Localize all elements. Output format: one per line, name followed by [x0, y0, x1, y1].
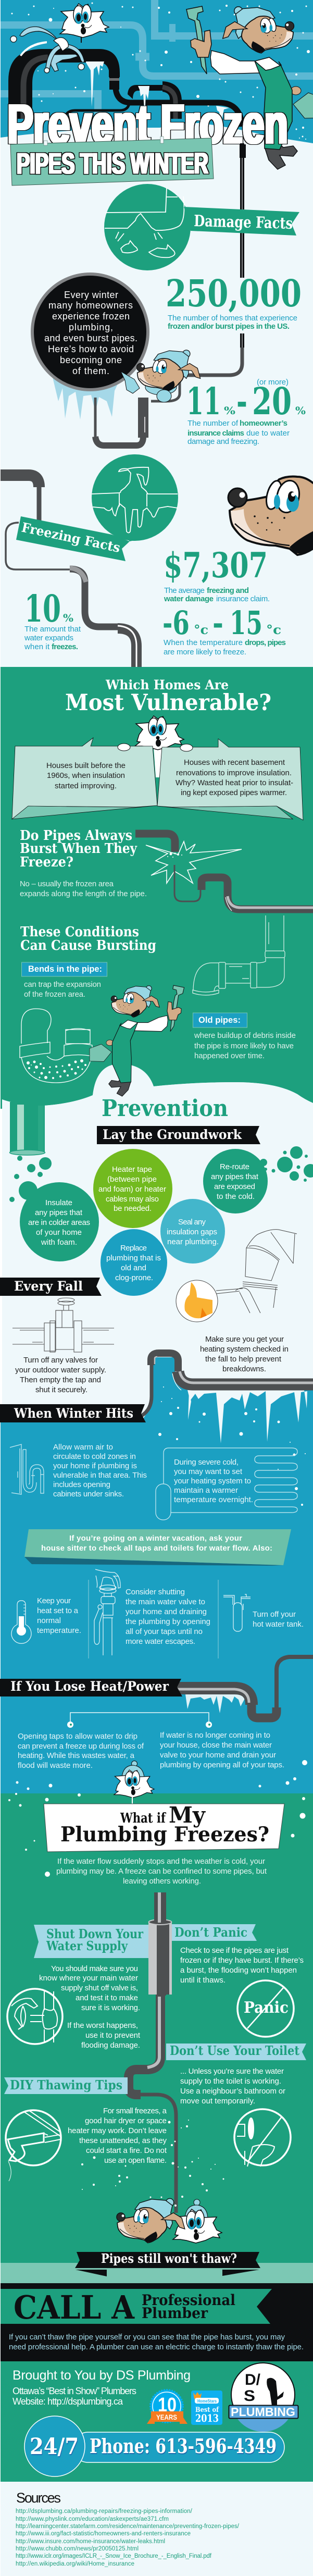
- text: unless: Use a neighbour’s bathroom or: [180, 2087, 285, 2096]
- stat: -6C to -15C: are more likely to freeze.: [164, 648, 246, 657]
- heading: which homes: Most Vulnerable?: [65, 690, 271, 716]
- banner: vacation note: house sitter to check all taps and toilets for water flow. Also:: [41, 1544, 272, 1553]
- stat: 10%: water expands: [24, 634, 73, 642]
- winding grey pipe: left: [1, 475, 136, 667]
- text: main water valve: If the worst happens,: [67, 2021, 138, 2030]
- sign: what if my plumbing freezes: What if: [120, 1811, 166, 1826]
- circle: seal: insulation gaps: [167, 1228, 217, 1236]
- icon: hand on valve: [7, 1989, 62, 2044]
- circle: seal: Seal any: [178, 1218, 206, 1227]
- text: opening taps: [18, 1732, 144, 1770]
- panel: basement renovations: Houses with recent basement: [184, 758, 285, 767]
- stat: $7,307: The average: [164, 586, 205, 595]
- stat: 11% to 20%: -: [236, 379, 247, 423]
- intro circle: experience frozen: [52, 311, 130, 321]
- title sign: [10, 137, 214, 185]
- text: allow warm air: your home if plumbing is: [53, 1462, 137, 1470]
- text: opening taps: can prevent a freeze up during loss of: [18, 1742, 144, 1751]
- stat: 11% to 20%: (or more): [257, 378, 289, 387]
- panel: call a professional plumber: If you can’t thaw the pipe yourself or you can see that the pipe has burst, you may: [9, 2333, 285, 2342]
- black pipes with ice: [8, 41, 242, 128]
- ribbon: DIY thawing tips: DIY Thawing Tips: [10, 2077, 122, 2092]
- title sign: PIPES THIS WINTER: [17, 147, 208, 180]
- text: turn off tank: Turn off your: [253, 1610, 296, 1619]
- stat: $7,307: [164, 545, 270, 603]
- stat: 11% to 20%: %: [295, 404, 306, 417]
- text: old pipes explanation: happened over time.: [194, 1051, 265, 1060]
- text: small freezes: use an open flame.: [104, 2156, 167, 2165]
- heading: sources: Sources: [16, 2490, 61, 2506]
- text: main water valve: supply shut off valve is,: [61, 1984, 138, 1992]
- background pale pipes: [1, 0, 313, 128]
- text: main water valve: sure it is working.: [81, 2003, 140, 2012]
- heading: these conditions: Can Cause Bursting: [20, 938, 156, 953]
- label: bends in the pipe: [22, 962, 107, 976]
- circle: replace: plumbing that is: [106, 1254, 161, 1262]
- icon: thermometer: [11, 1601, 31, 1643]
- text: brought to you by: [12, 2368, 191, 2407]
- text: water no longer coming: [160, 1731, 284, 1769]
- text: severe cold: [174, 1458, 253, 1504]
- thin riser pipe: [185, 143, 246, 375]
- text: old pipes explanation: [194, 1031, 296, 1060]
- sign: what if my plumbing freezes: My: [169, 1802, 206, 1828]
- banner: vacation note: If you’re going on a winter vacation, ask your: [69, 1534, 242, 1543]
- text: bends explanation: can trap the expansion: [24, 980, 101, 989]
- list: source links: http://learningcenter.statefarm.com/residence/maintenance/preventing-frozen-pipes/: [16, 2523, 240, 2530]
- text: keep heat: Keep your: [37, 1596, 71, 1605]
- text: water no longer coming: plumbing by opening all of your taps.: [160, 1761, 284, 1769]
- sign: what if my plumbing freezes: [44, 1802, 284, 1852]
- panel: call a professional plumber: Plumber: [142, 2305, 208, 2322]
- stat: -6C to -15C: [162, 604, 286, 657]
- stat: 10%: The amount that: [24, 625, 81, 634]
- dripping green faucet: [9, 1102, 52, 1202]
- text: small freezes: [68, 2107, 167, 2165]
- icicles under intro circle: [52, 375, 122, 419]
- cat with hat: bottom: [173, 2199, 222, 2243]
- intro circle: becoming one: [60, 355, 122, 365]
- text: check pipes: Check to see if the pipes are just: [180, 1946, 289, 1955]
- text: turn off valves: shut it securely.: [35, 1385, 87, 1394]
- icon: hot water tank: [223, 1594, 251, 1631]
- text: consider shutting: Consider shutting: [126, 1588, 185, 1596]
- label: old pipes: [193, 1013, 247, 1027]
- icon: main water valve: [94, 1569, 120, 1655]
- stat: -6C to -15C: When the temperature: [164, 638, 243, 647]
- ribbon: shut down water supply: Shut Down Your: [46, 1926, 143, 1941]
- stat: -6C to -15C: -6: [162, 604, 190, 642]
- panel: houses built before 1960s: Houses built before the: [46, 761, 126, 770]
- snow background: prevention section: [2, 1064, 313, 1428]
- text: small freezes: For small freezes, a: [103, 2107, 167, 2115]
- text: main water valve: You should make sure you: [51, 1964, 138, 1973]
- freezing icon circle: [92, 454, 178, 541]
- text: unless: supply to the toilet is working.: [180, 2077, 281, 2086]
- badge: homestars best of 2013: [191, 2391, 222, 2425]
- blue section background: [1, 1357, 313, 1793]
- list: source links: http://www.insure.com/home-insurance/water-leaks.html: [16, 2538, 165, 2545]
- heading: these conditions: [20, 924, 156, 953]
- circle: heater tape: cables may also: [106, 1195, 159, 1204]
- text: small freezes: good hair dryer or space: [85, 2116, 167, 2125]
- heading: these conditions: These Conditions: [20, 924, 139, 940]
- sky background: [1, 0, 313, 143]
- damage icon circle: [104, 184, 191, 270]
- phone pill: 24/7: [30, 2434, 79, 2460]
- intro circle: many homeowners: [48, 300, 133, 311]
- text: turn off tank: hot water tank.: [253, 1620, 304, 1629]
- list: source links: [16, 2508, 240, 2567]
- circle: insulate: are in colder areas: [28, 1218, 90, 1227]
- stat: 10%: %: [63, 612, 73, 624]
- text: allow warm air: circulate to cold zones in: [53, 1452, 136, 1461]
- text: bends explanation: [24, 980, 101, 999]
- heading: do pipes always burst: Do Pipes Always: [20, 828, 132, 844]
- stat: 11% to 20%: homeowner’s: [240, 419, 287, 428]
- stat: 10%: freezes.: [52, 642, 78, 651]
- text: severe cold: During severe cold,: [174, 1458, 239, 1467]
- banner: when winter hits: When Winter Hits: [14, 1406, 133, 1421]
- stat: 11% to 20%: insurance claims: [187, 429, 244, 438]
- text: opening taps: flood will waste more.: [18, 1761, 93, 1770]
- snow flakes: blue section: [158, 1386, 306, 1506]
- text: check pipes: [180, 1946, 304, 1985]
- icon: valve: [12, 1298, 114, 1352]
- intro circle: Every winter: [64, 290, 118, 300]
- icon: no panic: Panic: [244, 1999, 289, 2017]
- circle: insulate: any pipes that: [35, 1208, 83, 1217]
- text: turn off tank: [253, 1610, 304, 1629]
- water spray from burst pipe: [10, 27, 84, 73]
- icon: no toilet: [234, 2109, 291, 2166]
- text: heating system: Make sure you get your: [205, 1335, 284, 1344]
- text: severe cold: temperature overnight.: [174, 1495, 253, 1504]
- panel: call a professional plumber: [1, 2283, 313, 2361]
- stat: 11% to 20%: [186, 378, 306, 446]
- text: check pipes: a burst, the flooding won’t happen: [180, 1966, 297, 1975]
- text: no, usually: [20, 880, 147, 898]
- dog head: bottom: [117, 2198, 185, 2243]
- stat: 10%: when it: [24, 642, 50, 651]
- icon: elbow sketch and thumb: [176, 1230, 297, 1322]
- text: heating system: the fall to help prevent: [205, 1355, 282, 1364]
- banner: if you lose heat: If You Lose Heat/Power: [10, 1679, 169, 1694]
- sign: what if my plumbing freezes: Plumbing Freezes?: [60, 1823, 269, 1847]
- icon: wall and sink trap: [10, 1444, 44, 1494]
- stat: 250,000: The number of homes that experience: [168, 314, 297, 323]
- circle: seal: near plumbing.: [167, 1237, 219, 1246]
- logo: DS plumbing: S: [244, 2387, 255, 2405]
- text: opening taps: heating. While this wastes water, a: [18, 1751, 135, 1760]
- stat: -6C to -15C: 15: [230, 604, 262, 642]
- circle: re-route: any pipes that: [211, 1172, 259, 1181]
- circle: heater tape: be needed.: [114, 1204, 152, 1213]
- list: source links: http://en.wikipedia.org/wiki/Home_insurance: [16, 2561, 134, 2567]
- stat: 250,000: frozen and/or burst pipes in the US.: [168, 322, 290, 331]
- heading: prevention: Prevention: [102, 1095, 228, 1122]
- circle: insulate: of your home: [36, 1228, 82, 1237]
- circle: heater tape: Heater tape: [112, 1165, 152, 1174]
- circle: insulate: with foam.: [41, 1238, 77, 1247]
- text: heating system: breakdowns.: [222, 1365, 266, 1373]
- text: severe cold: maintain a warmer: [174, 1486, 238, 1495]
- text: keep heat: heat set to a: [37, 1606, 79, 1615]
- ribbon: damage facts: Damage Facts: [194, 212, 293, 233]
- text: allow warm air: Allow warm air to: [53, 1443, 113, 1452]
- stat: -6C to -15C: drops, pipes: [245, 638, 286, 647]
- text: allow warm air: [53, 1443, 147, 1498]
- text: severe cold: you may want to set: [174, 1467, 243, 1476]
- circle: replace: [101, 1229, 167, 1296]
- list: source links: http://dsplumbing.ca/plumbing-repairs/freezing-pipes-information/: [16, 2508, 193, 2515]
- text: heating system: heating system checked in: [200, 1345, 289, 1354]
- stat: -6C to -15C: °c: [266, 622, 281, 637]
- badge: 10 years: YEARS: [156, 2413, 177, 2421]
- snow flakes: thawing: [81, 2120, 224, 2207]
- badge: 10 years: 10: [158, 2394, 177, 2416]
- text: main water valve: [39, 1964, 141, 2050]
- banner: every fall: [0, 1278, 102, 1296]
- circle: insulate: Insulate: [45, 1198, 72, 1207]
- text: turn off valves: Turn off any valves for: [23, 1356, 98, 1365]
- stat: $7,307: insurance claim.: [216, 595, 270, 603]
- panel: call a professional plumber: CALL A: [14, 2288, 135, 2326]
- cat with hat: [114, 1761, 154, 1804]
- stat: 11% to 20%: %: [224, 404, 235, 417]
- panel: basement renovations: ing kept exposed pipes warmer.: [181, 788, 287, 797]
- text: unless: [180, 2067, 285, 2106]
- ribbon: shut down water supply: [34, 1925, 148, 1958]
- label: old pipes: Old pipes:: [198, 1015, 241, 1025]
- list: source links: http://www.chubb.com/news/pr20050125.html: [16, 2546, 139, 2552]
- text: consider shutting: all of your taps until no: [126, 1627, 203, 1636]
- text: keep heat: normal: [37, 1616, 61, 1625]
- text: water no longer coming: your house, close the main water: [160, 1741, 272, 1750]
- cat on top of pipe: [54, 4, 109, 51]
- green section background: [1, 667, 313, 1109]
- stat: $7,307: $7,307: [164, 545, 268, 586]
- grey pipe with icicles: [142, 1353, 313, 1443]
- badge: homestars best of 2013: HomeStars: [197, 2399, 217, 2404]
- logo: DS plumbing: D/: [245, 2371, 261, 2388]
- intro circle: [32, 274, 148, 390]
- dog on snow: [90, 985, 184, 1096]
- droplets: right: [260, 1146, 313, 1182]
- large dog face: [228, 477, 313, 555]
- text: consider shutting: more water escapes.: [126, 1637, 195, 1646]
- circle: insulate: [20, 1182, 99, 1261]
- ribbon: freezing facts: Freezing Facts: [20, 520, 122, 555]
- text: turn off valves: your outdoor water supply.: [15, 1366, 106, 1374]
- text: no, usually: expands along the length of the pipe.: [20, 889, 147, 898]
- list: source links: http://www.iii.org/fact-statistic/homeowners-and-renters-insurance: [16, 2531, 191, 2537]
- stat: 11% to 20%: 11: [186, 379, 221, 423]
- circle: re-route: are exposed: [214, 1182, 255, 1191]
- panel: basement renovations: Why? Wasted heat prior to insulat-: [176, 778, 293, 787]
- banner: pipes still won't thaw: Pipes still won't thaw?: [101, 2251, 237, 2266]
- panel: call a professional plumber: need professional help. A plumber can use an electric charge to instantly thaw the pipe.: [9, 2343, 304, 2351]
- grey pipes around dog: [95, 375, 185, 445]
- panel: houses built before 1960s: started improving.: [55, 782, 117, 790]
- text: small freezes: could start a fire. Do not: [86, 2146, 167, 2155]
- panel: houses built before 1960s: [12, 738, 157, 819]
- burst pipe: [135, 834, 313, 911]
- badge: 10 years: [147, 2390, 187, 2424]
- circle: heater tape: [93, 1149, 172, 1228]
- cat between panels: [135, 716, 184, 777]
- stat: 11% to 20%: damage and freezing.: [187, 437, 259, 446]
- badge: homestars best of 2013: Best of: [195, 2406, 219, 2414]
- green section background: plumbing freezes: [1, 1793, 313, 2263]
- heading: do pipes always burst: Burst When They: [20, 841, 137, 857]
- heading: which homes: [65, 677, 271, 716]
- text: consider shutting: the plumbing by opening: [126, 1617, 210, 1626]
- ribbon: damage facts: [184, 207, 299, 236]
- text: old pipes explanation: the pipe is more likely to have: [194, 1042, 294, 1050]
- banner: lay the groundwork: Lay the Groundwork: [103, 1127, 242, 1142]
- text: main water valve: and test it to make: [76, 1993, 138, 2002]
- circle: heater tape: (between pipe: [107, 1175, 157, 1184]
- stat: 11% to 20%: due to water: [246, 429, 290, 438]
- central pipe with sleeve: [129, 1892, 176, 2213]
- footer green background: [1, 2361, 313, 2482]
- panel: call a professional plumber: Professional: [142, 2292, 235, 2309]
- stat: -6C to -15C: -: [212, 604, 223, 642]
- text: if the water flow stops: [56, 1857, 267, 1886]
- text: small freezes: these unattended, as they: [79, 2136, 167, 2145]
- text: brought to you by: Ottawa’s “Best in Show” Plumbers: [12, 2386, 136, 2396]
- snow flakes: what if: [8, 1760, 307, 1877]
- phone pill: [24, 2416, 284, 2476]
- circle: re-route: [203, 1149, 268, 1213]
- grey pipe with ice: lose heat: [177, 1657, 313, 1718]
- logo: DS plumbing: PLUMBING: [231, 2405, 295, 2419]
- dog peeking with paws: [121, 350, 201, 402]
- text: if the water flow stops: leaving others working.: [123, 1877, 201, 1886]
- panel: basement renovations: [157, 739, 303, 820]
- intro circle: and even burst pipes.: [44, 333, 137, 343]
- intro circle: of them.: [72, 366, 109, 376]
- text: water no longer coming: If water is no longer coming in to: [160, 1731, 270, 1740]
- text: opening taps: Opening taps to allow water to drip: [18, 1732, 137, 1741]
- banner: every fall: Every Fall: [14, 1279, 83, 1294]
- icon: radiator coil: [156, 1448, 297, 1520]
- badge: homestars best of 2013: 2013: [195, 2412, 219, 2424]
- intro circle: Here’s how to avoid: [48, 344, 134, 354]
- stat: $7,307: water damage: [164, 595, 214, 603]
- text: unless: ... Unless you’re sure the water: [180, 2067, 284, 2076]
- icon: outlined elbow pipes: [193, 915, 285, 995]
- snow flakes: top: [11, 2, 310, 140]
- text: keep heat: [37, 1596, 81, 1635]
- text: no, usually: No – usually the frozen area: [20, 880, 114, 888]
- text: brought to you by: Website: http://dsplumbing.ca: [12, 2396, 123, 2407]
- text: main water valve: know where your main water: [39, 1974, 138, 1983]
- dog plumber: [186, 6, 313, 169]
- text: keep heat: temperature.: [37, 1626, 81, 1635]
- circle: seal: [160, 1199, 225, 1264]
- logo: DS plumbing: [229, 2363, 298, 2432]
- label: bends in the pipe: Bends in the pipe:: [28, 964, 102, 974]
- stat: 250,000: [166, 271, 302, 331]
- text: if the water flow stops: plumbing may be. A freeze can be confined to some pipes, but: [56, 1867, 267, 1876]
- banner: vacation note: [24, 1529, 291, 1566]
- icon: u-trap with bubbles: [20, 1009, 92, 1083]
- stat: 11% to 20%: The number of: [187, 419, 239, 428]
- text: turn off valves: Then empty the tap and: [20, 1376, 101, 1384]
- heading: do pipes always burst: [20, 828, 137, 870]
- text: consider shutting: the main water valve to: [126, 1597, 205, 1606]
- connector with dots: [67, 1713, 212, 1728]
- text: check pipes: frozen or if they have burst. If there’s: [180, 1956, 304, 1965]
- text: small freezes: heater may work. Don’t leave: [68, 2126, 167, 2135]
- text: consider shutting: your home and draining: [126, 1607, 207, 1616]
- text: heating system: [200, 1335, 289, 1373]
- text: main water valve: flooding damage.: [81, 2041, 140, 2050]
- text: water no longer coming: valve to your home and drain your: [160, 1751, 276, 1760]
- heading: which homes: Which Homes Are: [105, 677, 229, 692]
- circle: re-route: to the cold.: [217, 1192, 255, 1201]
- text: check pipes: until it thaws.: [180, 1976, 226, 1985]
- circle: replace: old and: [121, 1264, 146, 1272]
- circle: re-route: Re-route: [220, 1162, 249, 1171]
- panel: basement renovations: renovations to improve insulation.: [176, 769, 292, 777]
- text: allow warm air: vulnerable in that area. This: [53, 1471, 147, 1480]
- circle: replace: clog-prone.: [115, 1273, 153, 1282]
- pale band: [1, 2263, 313, 2283]
- snow background: top section: [1, 0, 313, 667]
- text: old pipes explanation: where buildup of debris inside: [194, 1031, 296, 1040]
- text: allow warm air: includes opening: [53, 1480, 110, 1489]
- stat: 10%: 10: [24, 587, 61, 630]
- ribbon: shut down water supply: Water Supply: [46, 1938, 128, 1953]
- text: allow warm air: cabinets under sinks.: [53, 1490, 124, 1498]
- circle: replace: Replace: [120, 1244, 147, 1253]
- sources background: [1, 2482, 313, 2576]
- list: source links: http://www.physlink.com/education/askexperts/ae371.cfm: [16, 2516, 169, 2522]
- panel: houses built before 1960s: 1960s, when insulation: [47, 771, 125, 780]
- text: severe cold: your heating system to: [174, 1477, 251, 1485]
- text: if the water flow stops: If the water flow suddenly stops and the weather is cold, your: [57, 1857, 265, 1866]
- text: consider shutting: [126, 1588, 210, 1646]
- ribbon: don't panic: Don’t Panic: [174, 1925, 247, 1940]
- text: unless: move out temporarily.: [180, 2097, 255, 2106]
- list: source links: http://www.iclr.org/images/ICLR_-_Snow_Ice_Brochure_-_English_Final.pdf: [16, 2553, 212, 2559]
- text: bends explanation: of the frozen area.: [24, 990, 85, 999]
- text: brought to you by: Brought to You by DS Plumbing: [12, 2368, 191, 2383]
- stat: 10%: [24, 587, 81, 651]
- intro circle: plumbing,: [69, 322, 113, 332]
- stat: $7,307: freezing and: [207, 586, 249, 595]
- heading: do pipes always burst: Freeze?: [20, 854, 73, 870]
- circle: heater tape: and foam) or heater: [98, 1185, 166, 1194]
- icon: no panic: [237, 1980, 294, 2037]
- stat: -6C to -15C: °c: [194, 622, 208, 637]
- text: turn off valves: [15, 1356, 106, 1394]
- icon: hair dryer: [6, 2110, 61, 2181]
- banner: pipes still won't thaw: [75, 2251, 260, 2276]
- stat: 11% to 20%: 20: [252, 379, 292, 423]
- text: main water valve: use it to prevent: [85, 2031, 141, 2040]
